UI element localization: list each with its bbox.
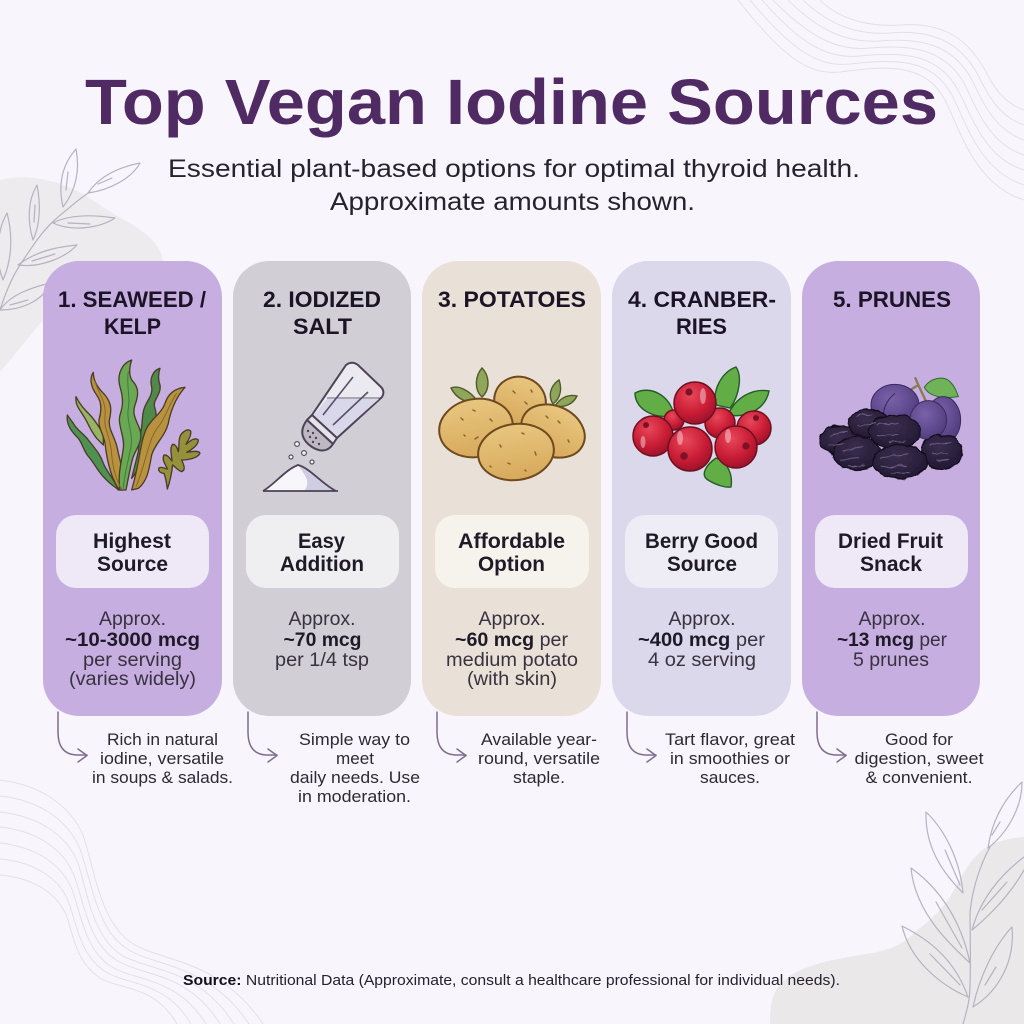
highlight pill: Option <box>478 553 545 576</box>
note: prunes: digestion, sweet <box>854 750 984 768</box>
icon: seaweed <box>67 360 200 490</box>
highlight pill: Berry Good <box>645 530 758 553</box>
highlight pill: Highest <box>93 530 171 553</box>
icon: salt shaker <box>263 363 383 491</box>
amount text <box>638 609 766 671</box>
icon: potatoes <box>435 368 593 485</box>
amount text <box>275 609 369 671</box>
heading: cranberries <box>628 287 776 339</box>
note: prunes: Good for <box>885 731 954 749</box>
panel: potatoes <box>422 261 601 716</box>
amount text: ~60 mcg per <box>455 630 569 651</box>
panel: seaweed / kelp <box>43 261 222 716</box>
amount text: medium potato <box>446 650 578 671</box>
note: seaweed: in soups & salads. <box>92 769 233 787</box>
note: potatoes: round, versatile <box>478 750 600 768</box>
amount text: (varies widely) <box>69 669 196 690</box>
arrow: seaweed note <box>58 712 87 762</box>
note: salt: Simple way to <box>299 731 410 749</box>
decoration: top-left leaf branch <box>0 149 140 310</box>
heading: iodized salt: 2. IODIZED <box>263 287 381 312</box>
note: cranberries: Tart flavor, great <box>665 731 795 749</box>
highlight pill: Dried Fruit <box>838 530 943 553</box>
note: cranberries: in smoothies or <box>670 750 791 768</box>
amount text <box>446 609 578 690</box>
subtitle: Essential plant-based options for optimal thyroid health. <box>168 155 860 183</box>
highlight pill <box>246 515 399 588</box>
amount text: 5 prunes <box>853 650 929 671</box>
panel: prunes <box>802 261 980 716</box>
amount text <box>837 609 948 671</box>
note: salt: daily needs. Use <box>290 769 420 787</box>
note: salt <box>290 731 420 806</box>
amount text: (with skin) <box>467 669 557 690</box>
note: potatoes: staple. <box>513 769 565 787</box>
highlight pill <box>625 515 778 588</box>
subtitle <box>168 155 860 216</box>
heading: potatoes: 3. POTATOES <box>438 287 586 312</box>
title: Top Vegan Iodine Sources <box>85 66 938 138</box>
heading: seaweed: 1. SEAWEED / <box>58 287 206 312</box>
arrow: cranberry note <box>627 712 656 762</box>
amount text: ~13 mcg per <box>837 630 948 651</box>
heading: cranberries: 4. CRANBER- <box>628 287 776 312</box>
heading: seaweed <box>58 287 206 339</box>
arrow: potato note <box>437 712 466 762</box>
highlight pill: Source <box>97 553 168 576</box>
highlight pill <box>815 515 968 588</box>
heading: iodized salt: SALT <box>293 314 353 339</box>
note: prunes: & convenient. <box>866 769 972 787</box>
amount text: Approx. <box>288 609 356 630</box>
heading: seaweed: KELP <box>104 314 161 339</box>
amount text: per 1/4 tsp <box>275 650 369 671</box>
icon: small frilly seaweed <box>159 430 200 489</box>
icon: cranberries <box>633 367 771 487</box>
arrow: salt note <box>248 712 277 762</box>
panel: cranberries <box>612 261 791 716</box>
note: seaweed: iodine, versatile <box>100 750 224 768</box>
decoration: top-right wave lines <box>738 0 1024 200</box>
subtitle: Approximate amounts shown. <box>330 188 695 216</box>
arrow: prune note <box>817 712 846 762</box>
note: cranberries: sauces. <box>700 769 760 787</box>
heading: cranberries: RIES <box>676 314 727 339</box>
amount text: ~70 mcg <box>284 630 362 651</box>
heading: iodized salt <box>263 287 381 339</box>
note: seaweed <box>92 731 233 787</box>
note: potatoes: Available year- <box>481 731 597 749</box>
decoration: bottom-left wave lines <box>0 780 263 1024</box>
amount text: Approx. <box>668 609 736 630</box>
note: seaweed: Rich in natural <box>107 731 218 749</box>
highlight pill <box>435 515 589 588</box>
note: cranberries <box>665 731 795 787</box>
decoration: bottom-right leaf branch <box>902 782 1024 1024</box>
amount text: Approx. <box>478 609 546 630</box>
note: prunes <box>854 731 984 787</box>
amount text: Approx. <box>99 609 166 630</box>
highlight pill: Snack <box>860 553 922 576</box>
source footnote: Source: Nutritional Data (Approximate, consult a healthcare professional for individual needs). <box>183 973 840 989</box>
note: salt: meet <box>336 750 374 768</box>
highlight pill: Source <box>667 553 737 576</box>
highlight pill: Easy <box>298 530 345 553</box>
amount text: Approx. <box>858 609 926 630</box>
amount text <box>65 609 200 690</box>
highlight pill: Addition <box>280 553 364 576</box>
note: salt: in moderation. <box>298 788 411 806</box>
amount text: per serving <box>83 650 182 671</box>
amount text: ~10-3000 mcg <box>65 630 200 651</box>
highlight pill <box>56 515 209 588</box>
panel: iodized salt <box>233 261 411 716</box>
amount text: ~400 mcg per <box>638 630 766 651</box>
icon: prunes and plums <box>820 377 962 478</box>
heading: prunes: 5. PRUNES <box>833 287 951 312</box>
decoration: top-left blob <box>0 177 163 372</box>
highlight pill: Affordable <box>458 530 565 553</box>
decoration: bottom-right blob <box>770 837 1024 1024</box>
amount text: 4 oz serving <box>648 650 756 671</box>
note: potatoes <box>478 731 600 787</box>
